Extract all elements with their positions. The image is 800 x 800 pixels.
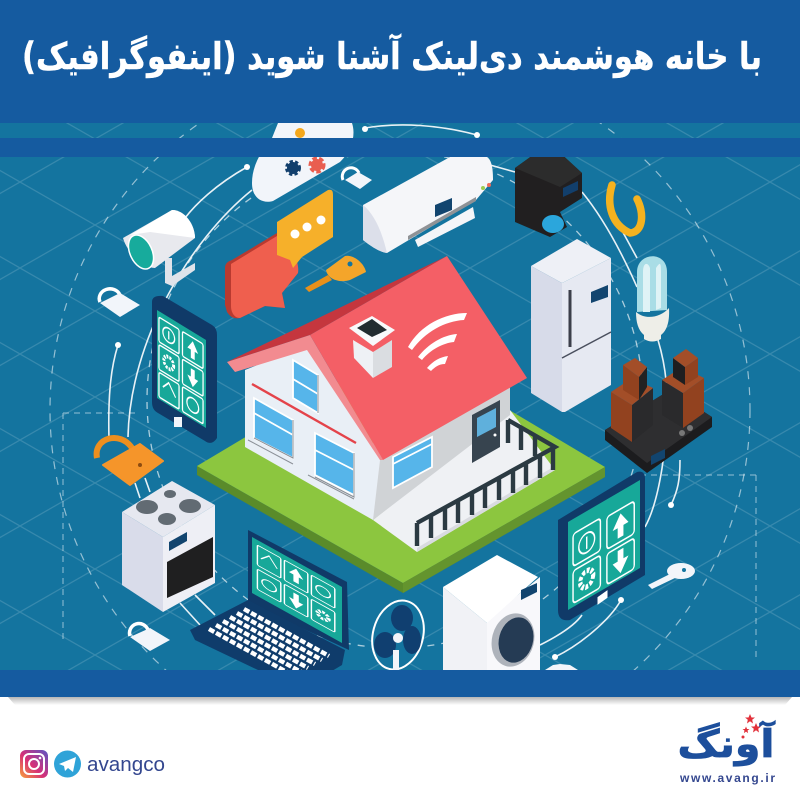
social handle: avangco — [87, 754, 165, 776]
left windows — [254, 360, 354, 495]
porch railing — [417, 420, 555, 546]
orange padlock — [97, 438, 163, 485]
white padlock lower — [130, 624, 170, 651]
tablet screen — [568, 480, 640, 610]
icon: white key — [648, 563, 695, 589]
top header band — [0, 0, 800, 123]
icon: yellow speech bubble — [277, 190, 333, 268]
oven stove — [122, 481, 215, 612]
icon: instagram — [20, 750, 48, 778]
icon: bottom gear — [545, 664, 578, 670]
porch floor — [373, 410, 555, 552]
house on green platform — [197, 256, 605, 593]
icon: refrigerator — [531, 239, 611, 412]
band shadow — [8, 697, 792, 705]
icon: speaker system — [605, 349, 712, 473]
blue strip over illustration — [0, 138, 800, 157]
icon: security camera — [123, 210, 195, 286]
window frames shadow — [248, 375, 354, 499]
dashed and solid connection arcs — [49, 123, 756, 670]
icon: telegram — [54, 750, 81, 778]
icon: white padlock — [99, 289, 140, 317]
logo: avang — [678, 714, 776, 785]
logo url: www.avang.ir — [679, 771, 775, 785]
laptop screen — [252, 537, 342, 643]
icon: air conditioner — [363, 157, 493, 253]
icon: horseshoe — [610, 185, 642, 233]
washing machine — [443, 555, 540, 672]
icon: orange key — [305, 256, 366, 292]
right window — [393, 437, 432, 488]
desk fan — [371, 600, 425, 670]
icon: light bulb — [636, 256, 669, 342]
bottom blue band — [0, 670, 800, 697]
illustration background — [0, 123, 800, 670]
phone screen — [157, 310, 206, 428]
icon: red speech bubble — [225, 233, 298, 318]
logo wordmark: آونگ — [678, 720, 776, 767]
right wall — [373, 388, 510, 520]
chimney — [349, 316, 395, 378]
icon: coffee machine — [515, 150, 582, 237]
smartphone — [152, 296, 217, 443]
laptop — [190, 530, 349, 670]
keyboard keys — [209, 609, 329, 676]
green platform — [197, 382, 605, 593]
icon: cloud — [252, 123, 354, 202]
logo stars — [742, 714, 761, 738]
icon: top padlock — [342, 168, 372, 189]
door — [472, 400, 500, 463]
roof — [227, 256, 527, 460]
red wall stripe — [252, 384, 356, 443]
left wall — [245, 345, 380, 520]
icon: wifi signal on roof — [408, 313, 467, 371]
tablet — [558, 472, 645, 620]
